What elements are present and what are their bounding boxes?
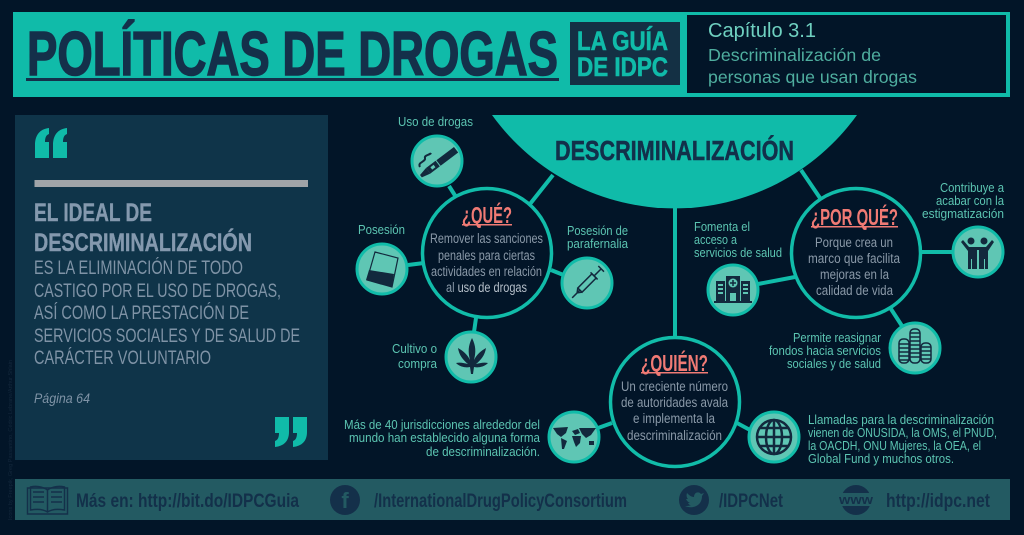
- icon: closing quote: [275, 417, 307, 447]
- link: website: http://idpc.net: [886, 491, 991, 512]
- label: jurisdicciones: Más de 40 jurisdicciones alrededor del: [344, 417, 540, 432]
- icon: coins: [890, 323, 940, 373]
- icon: book: [28, 486, 68, 514]
- icon: bag: [357, 244, 407, 294]
- panel: por qué: mejoras en la: [820, 267, 889, 282]
- label: estigmatización: acabar con la: [936, 193, 1005, 208]
- panel: quién: descriminalización: [627, 428, 722, 443]
- label: fondos: [769, 330, 882, 371]
- link: facebook: /InternationalDrugPolicyConsortium: [374, 491, 627, 512]
- label: jurisdicciones: de descriminalización.: [426, 444, 540, 459]
- quote heading: [34, 199, 252, 257]
- panel: por qué: calidad de vida: [816, 283, 893, 298]
- quote text: [34, 257, 300, 369]
- label: estigmatización: [922, 180, 1005, 221]
- label: fondos: Permite reasignar: [793, 330, 882, 345]
- divider bar: [34, 180, 308, 187]
- quote text: ES LA ELIMINACIÓN DE TODO: [34, 257, 243, 279]
- panel: quote: [15, 115, 328, 460]
- label: llamadas: [808, 412, 997, 466]
- panel: qué: penales para ciertas: [438, 248, 535, 263]
- quote heading: EL IDEAL DE: [34, 199, 152, 227]
- panel: por qué: Porque crea un: [815, 235, 893, 250]
- icon credits: Icons by Freepik, Greg Passantino, Cédric Lebrane/Arthur Shlain: [8, 360, 14, 520]
- guide badge: DE IDPC: [577, 52, 668, 82]
- label: acceso a salud: [694, 219, 782, 260]
- panel: qué: al uso de drogas: [446, 280, 527, 295]
- quote text: SERVICIOS SOCIALES Y DE SALUD DE: [34, 326, 300, 347]
- icon: www: www: [838, 492, 874, 507]
- label: fondos: fondos hacia servicios: [769, 343, 881, 358]
- panel: qué: [422, 188, 552, 318]
- panel: quién: Un creciente número: [621, 379, 728, 394]
- quote text: ASÍ COMO LA PRESTACIÓN DE: [34, 302, 249, 324]
- quote text: CASTIGO POR EL USO DE DROGAS,: [34, 281, 281, 302]
- icon: facebook: [330, 485, 360, 515]
- panel: quién: ¿QUIÉN?: [641, 349, 708, 376]
- label: jurisdicciones: [344, 417, 541, 459]
- guide badge: LA GUÍA: [577, 25, 668, 56]
- title: POLÍTICAS DE DROGAS: [27, 20, 558, 89]
- icon: vape: [412, 136, 462, 186]
- label: acceso a salud: acceso a: [694, 232, 738, 247]
- guide badge: [570, 22, 680, 85]
- label: acceso a salud: Fomenta el: [694, 219, 750, 234]
- label: llamadas: Llamadas para la descriminalización: [808, 412, 994, 427]
- panel: por qué: ¿POR QUÉ?: [811, 203, 898, 230]
- label: estigmatización: Contribuye a: [940, 180, 1005, 195]
- icon: people: [953, 227, 1003, 277]
- icon: cannabis leaf: [446, 332, 496, 382]
- label: parafernalia: Posesión de: [567, 223, 628, 238]
- panel: qué: Remover las sanciones: [430, 231, 543, 246]
- icon: facebook: f: [341, 488, 349, 513]
- label: posesión: Posesión: [358, 222, 405, 237]
- panel: quién: e implementa la: [633, 411, 715, 426]
- chapter box: [687, 15, 1006, 93]
- icon: world map: [549, 412, 599, 462]
- icon: twitter: [679, 485, 709, 515]
- panel: qué: ¿QUÉ?: [462, 201, 512, 228]
- quote heading: DESCRIMINALIZACIÓN: [34, 227, 252, 257]
- label: jurisdicciones: mundo han establecido alguna forma: [349, 430, 541, 445]
- label: acceso a salud: servicios de salud: [694, 245, 782, 260]
- icon: syringe: [562, 258, 612, 308]
- label: estigmatización: estigmatización: [922, 206, 1004, 221]
- label: llamadas: la OACDH, ONU Mujeres, la OEA, el: [808, 438, 981, 453]
- central dome: descriminalización: [492, 115, 857, 208]
- icon: opening quote: [35, 128, 67, 158]
- chapter box: Descriminalización de: [708, 45, 881, 65]
- label: parafernalia: parafernalia: [567, 236, 629, 251]
- label: cultivo: compra: [398, 356, 438, 371]
- panel: quién: [610, 338, 740, 466]
- link: twitter: /IDPCNet: [719, 491, 784, 512]
- icon: globe: [749, 412, 799, 462]
- label: llamadas: Global Fund y muchos otros.: [808, 451, 954, 466]
- label: uso de drogas: Uso de drogas: [398, 114, 473, 129]
- label: cultivo: Cultivo o: [392, 341, 437, 356]
- label: parafernalia: [567, 223, 629, 251]
- chapter box: Capítulo 3.1: [708, 20, 816, 42]
- icon: hospital: [708, 265, 758, 315]
- link: guide: Más en: http://bit.do/IDPCGuia: [76, 491, 299, 512]
- panel: quién: de autoridades avala: [621, 395, 728, 410]
- quote text: CARÁCTER VOLUNTARIO: [34, 348, 211, 369]
- panel: por qué: marco que facilita: [808, 251, 900, 266]
- page reference: Página 64: [34, 390, 90, 406]
- connector lines: [408, 170, 953, 430]
- panel: qué: actividades en relación: [431, 264, 542, 279]
- label: cultivo: [392, 341, 438, 371]
- footer bar: [15, 479, 1010, 520]
- label: fondos: sociales y de salud: [787, 356, 881, 371]
- chapter box: personas que usan drogas: [708, 67, 917, 87]
- header banner: [13, 12, 1010, 97]
- panel: por qué: [792, 188, 920, 318]
- icon: www: [838, 485, 874, 515]
- central dome: descriminalización: DESCRIMINALIZACIÓN: [555, 135, 794, 166]
